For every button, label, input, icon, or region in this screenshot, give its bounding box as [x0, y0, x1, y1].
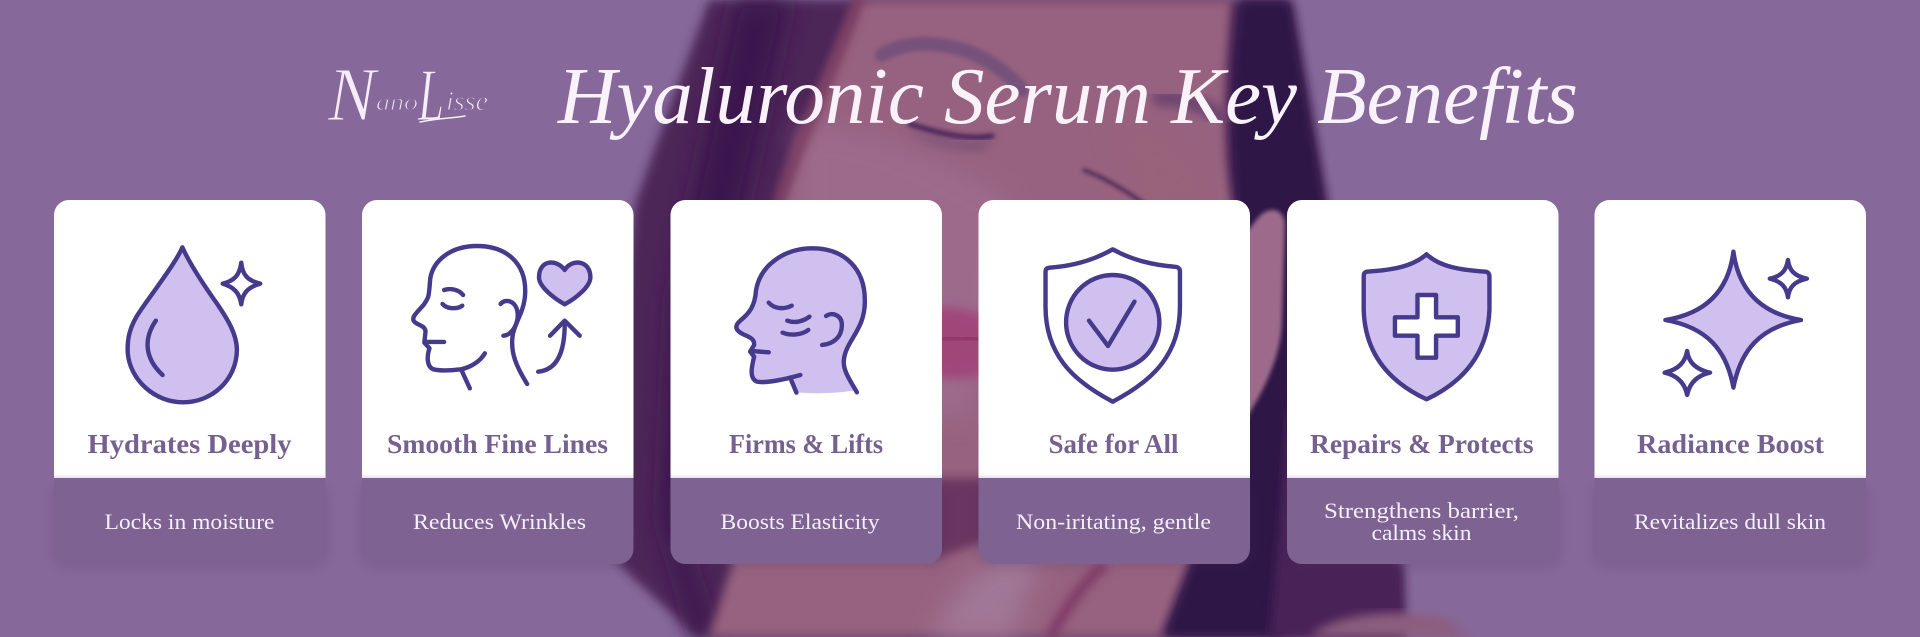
logo: N — [327, 53, 380, 137]
description: Strengthens barrier, — [1324, 498, 1519, 523]
description: Revitalizes dull skin — [1634, 509, 1826, 534]
icon: sparkles — [1665, 252, 1807, 395]
logo: L — [417, 55, 444, 137]
description: calms skin — [1372, 520, 1472, 545]
heading: Repairs & Protects — [1310, 429, 1534, 459]
description: Locks in moisture — [104, 509, 274, 534]
icon: face with heart and arrow — [413, 246, 590, 388]
hair — [612, 0, 1404, 637]
logo — [327, 53, 488, 137]
shoulder — [1310, 613, 1470, 637]
icon: water drop with sparkle — [128, 247, 260, 402]
icon: shield with check — [1046, 249, 1180, 402]
description: Boosts Elasticity — [720, 509, 880, 534]
heading: Hydrates Deeply — [88, 429, 292, 459]
logo: isse — [446, 86, 488, 116]
panel: Repairs & Protects — [1283, 200, 1563, 570]
description: Reduces Wrinkles — [413, 509, 586, 534]
heading: Firms & Lifts — [729, 429, 883, 459]
panel: Firms & Lifts — [667, 200, 947, 570]
icon: shield with cross — [1364, 254, 1489, 399]
lips — [925, 308, 990, 379]
description: Non-iritating, gentle — [1016, 509, 1211, 534]
heading: Smooth Fine Lines — [387, 429, 608, 459]
panel: Smooth Fine Lines — [358, 200, 638, 570]
hair shine — [778, 0, 860, 205]
logo: ano — [376, 90, 418, 116]
hand shadow — [930, 478, 990, 560]
panel: Radiance Boost — [1591, 200, 1871, 570]
icon: filled head profile — [736, 248, 865, 393]
heading: Safe for All — [1048, 429, 1179, 459]
finger at ear — [1240, 210, 1285, 420]
right dark hair — [1163, 0, 1326, 637]
panel: Safe for All — [975, 200, 1255, 570]
panel: Hydrates Deeply — [50, 200, 330, 570]
title: Hyaluronic Serum Key Benefits — [557, 51, 1578, 141]
eyebrow, eyes — [882, 44, 1022, 90]
description — [1324, 498, 1519, 545]
heading: Radiance Boost — [1637, 429, 1824, 459]
hand below cards — [930, 555, 1040, 637]
face — [700, 0, 1240, 637]
